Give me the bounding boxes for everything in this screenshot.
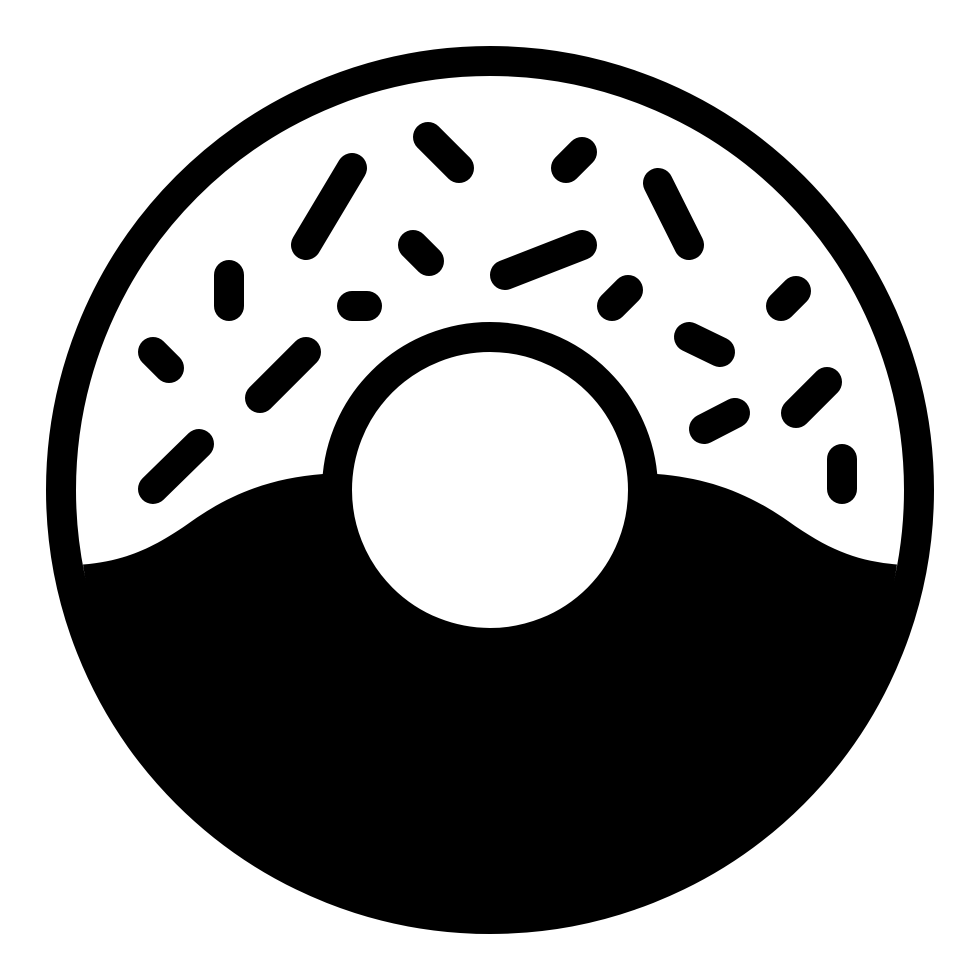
donut outer ring bbox=[61, 61, 919, 919]
chocolate lower body bbox=[83, 474, 897, 925]
sprinkles bbox=[153, 137, 842, 489]
donut hole bbox=[337, 337, 643, 643]
